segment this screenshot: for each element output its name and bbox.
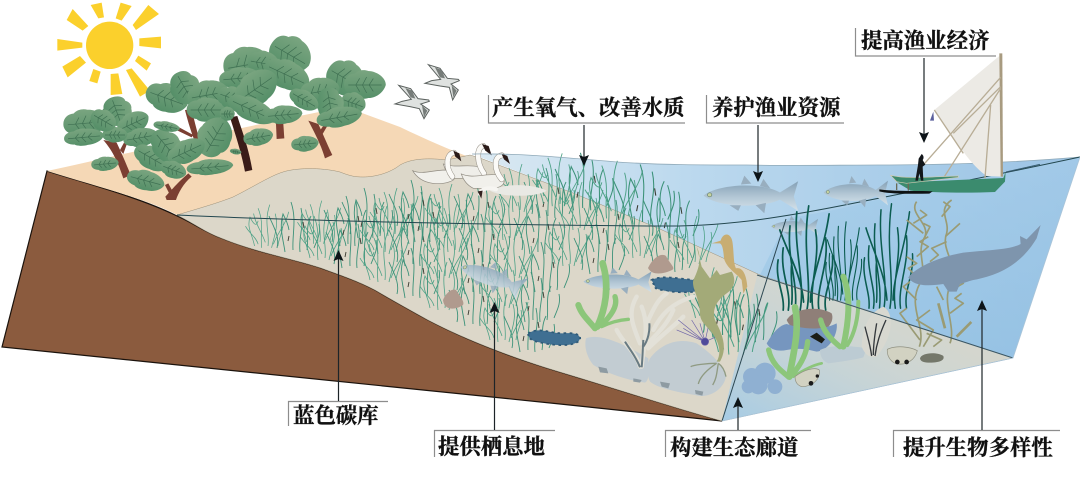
sailing boat bbox=[879, 53, 1040, 194]
glass panel edge bbox=[722, 219, 786, 421]
kelp bbox=[900, 200, 971, 347]
sea urchin bbox=[677, 320, 717, 345]
arrow: 养护渔业资源 bbox=[753, 125, 763, 182]
mangrove trees bbox=[62, 27, 386, 200]
arrow: 蓝色碳库 bbox=[334, 250, 344, 401]
label: 提升生物多样性: 提升生物多样性 bbox=[903, 436, 1053, 460]
seabed bbox=[177, 155, 1013, 421]
fish on seabed bbox=[453, 252, 652, 301]
water surface lines bbox=[177, 154, 1080, 226]
light seagrass meadow bbox=[246, 153, 777, 355]
rocks and coral left bbox=[578, 235, 747, 396]
green algae bbox=[578, 263, 628, 328]
arrow: 提高渔业经济 bbox=[919, 58, 929, 143]
arrow: 构建生态廊道 bbox=[733, 397, 743, 430]
arrow: 产生氧气 bbox=[579, 125, 589, 166]
deep seagrass bbox=[777, 204, 913, 310]
arrow: 提升生物多样性 bbox=[977, 300, 987, 430]
label: 提高渔业经济: 提高渔业经济 bbox=[861, 28, 989, 53]
birds bbox=[395, 65, 459, 119]
label: 产生氧气、改善水质: 产生氧气、改善水质 bbox=[492, 96, 685, 120]
label: 构建生态廊道: 构建生态廊道 bbox=[670, 435, 798, 460]
arrow: 提供栖息地 bbox=[490, 302, 500, 430]
sun bbox=[57, 3, 161, 97]
label: 提供栖息地: 提供栖息地 bbox=[438, 435, 545, 459]
soil cross-section bbox=[2, 171, 722, 421]
sea cucumbers bbox=[528, 277, 695, 345]
water body bbox=[472, 154, 1080, 358]
crabs bbox=[887, 347, 917, 364]
stones bbox=[443, 255, 673, 309]
label: 养护渔业资源: 养护渔业资源 bbox=[712, 96, 842, 120]
dugong bbox=[908, 225, 1041, 292]
fish school bbox=[704, 176, 888, 236]
water front panel bbox=[760, 157, 1080, 358]
sandy beach bbox=[47, 108, 500, 215]
seabed back edge bbox=[757, 275, 1013, 358]
reef creatures right bbox=[742, 277, 944, 394]
label: 蓝色碳库: 蓝色碳库 bbox=[293, 403, 379, 428]
algae right bbox=[769, 277, 858, 377]
seabed under front panel bbox=[722, 276, 1013, 421]
water outer edge bbox=[722, 157, 1080, 421]
blue coral bbox=[742, 363, 782, 394]
seahorse bbox=[712, 235, 747, 293]
kelp frond bbox=[693, 247, 734, 362]
swans bbox=[413, 144, 547, 199]
